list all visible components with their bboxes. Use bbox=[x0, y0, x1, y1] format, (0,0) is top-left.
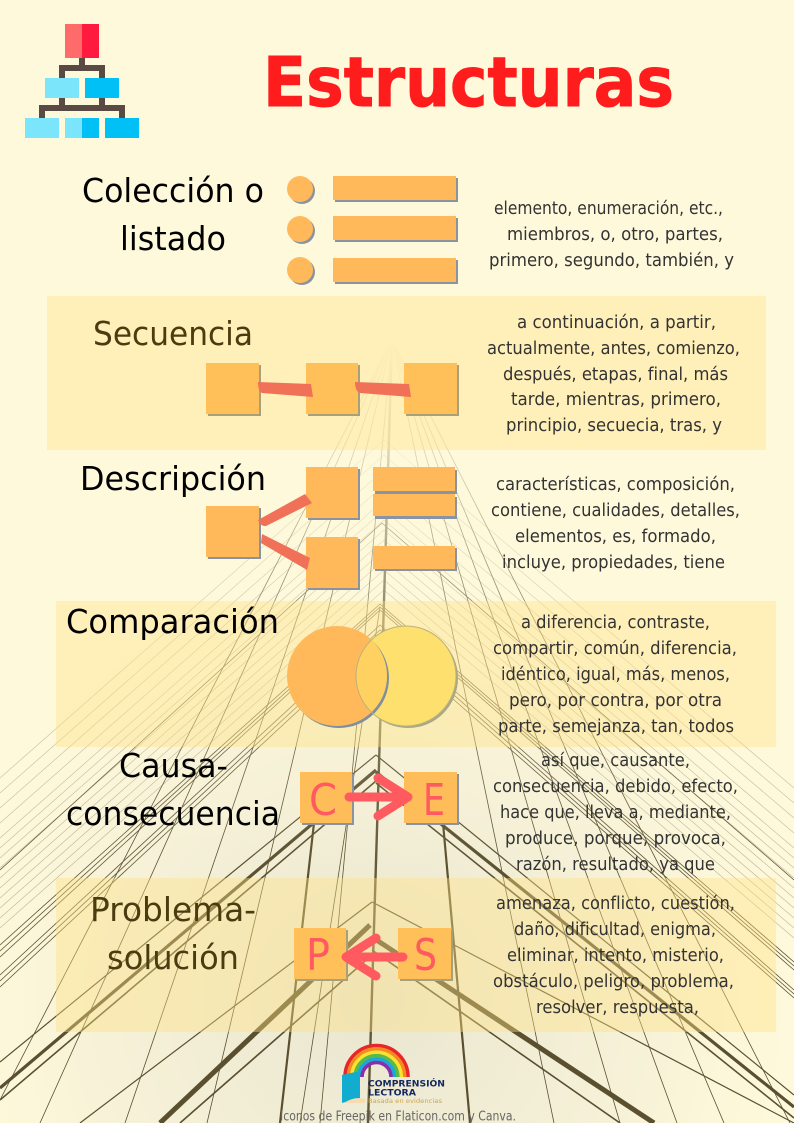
text: causa words: produce, porque, provoca, bbox=[505, 829, 726, 849]
icon: list bbox=[287, 176, 458, 285]
heading: colección: Colección o bbox=[82, 171, 264, 210]
text: secuencia words: tarde, mientras, primero, bbox=[511, 390, 721, 410]
text: secuencia words bbox=[487, 313, 740, 436]
heading: problema-solución: solución bbox=[107, 938, 239, 977]
icon: cause arrow effect bbox=[300, 772, 459, 826]
panel: causa-consecuencia bbox=[66, 746, 738, 875]
panel: colección bbox=[82, 171, 734, 285]
text: secuencia words: después, etapas, final, más bbox=[503, 365, 728, 385]
text: causa words bbox=[493, 751, 738, 875]
heading: problema-solución: Problema- bbox=[90, 890, 256, 929]
text: comparación words bbox=[493, 613, 737, 737]
text: problema words: resolver, respuesta, bbox=[536, 998, 699, 1018]
text: problema words: eliminar, intento, misterio, bbox=[507, 946, 724, 966]
text: comparación words: idéntico, igual, más, menos, bbox=[501, 665, 730, 685]
text: colección words: elemento, enumeración, etc., bbox=[494, 199, 723, 219]
icon: cause arrow effect: C bbox=[309, 775, 337, 826]
text: problema words: obstáculo, peligro, problema, bbox=[493, 972, 734, 992]
icon: venn bbox=[287, 626, 458, 728]
text: causa words: hace que, lleva a, mediante, bbox=[500, 803, 731, 823]
heading: causa-consecuencia: Causa- bbox=[119, 746, 228, 785]
text: comparación words: compartir, común, diferencia, bbox=[493, 639, 737, 659]
text: descripción words: incluye, propiedades, tiene bbox=[502, 553, 725, 573]
heading: descripción: Descripción bbox=[80, 459, 266, 498]
text: comparación words: parte, semejanza, tan, todos bbox=[498, 717, 734, 737]
text: problema words bbox=[493, 894, 735, 1018]
text: colección words bbox=[489, 199, 734, 271]
text: problema words: amenaza, conflicto, cuestión, bbox=[496, 894, 735, 914]
text: secuencia words: a continuación, a partir, bbox=[517, 313, 716, 333]
text: secuencia words: actualmente, antes, comienzo, bbox=[487, 339, 740, 359]
text: causa words: razón, resultado, ya que bbox=[516, 855, 715, 875]
heading: causa-consecuencia: consecuencia bbox=[66, 794, 280, 833]
icon: cause arrow effect: E bbox=[423, 775, 445, 826]
title: Estructuras bbox=[263, 43, 674, 123]
icon: solution arrow problem bbox=[294, 928, 453, 981]
text: problema words: daño, dificultad, enigma, bbox=[514, 920, 716, 940]
text: causa words: así que, causante, bbox=[541, 751, 690, 771]
text: secuencia words: principio, secuecia, tras, y bbox=[506, 416, 722, 436]
logo: LECTORA bbox=[368, 1088, 416, 1098]
heading: colección bbox=[82, 171, 264, 258]
text: comparación words: a diferencia, contraste, bbox=[521, 613, 710, 633]
heading: causa-consecuencia bbox=[66, 746, 280, 833]
logo: Basada en evidencias bbox=[368, 1097, 443, 1105]
heading: problema-solución bbox=[90, 890, 256, 977]
icon: solution arrow problem: S bbox=[414, 930, 437, 981]
icon: sequence bbox=[206, 363, 459, 416]
heading: comparación: Comparación bbox=[66, 602, 279, 641]
logo bbox=[342, 1046, 445, 1105]
panel: descripción bbox=[80, 459, 740, 590]
text: colección words: miembros, o, otro, partes, bbox=[507, 225, 723, 245]
icon: description bbox=[206, 467, 457, 590]
text: descripción words: contiene, cualidades, detalles, bbox=[491, 501, 740, 521]
logo: COMPRENSIÓN bbox=[368, 1078, 445, 1090]
panel: secuencia bbox=[47, 296, 766, 450]
heading: secuencia: Secuencia bbox=[93, 314, 253, 353]
panel: comparación bbox=[56, 601, 776, 747]
text: descripción words: elementos, es, formado, bbox=[515, 527, 716, 547]
panel: problema-solución bbox=[56, 878, 776, 1032]
text: descripción words: características, composición, bbox=[496, 475, 735, 495]
heading: colección: listado bbox=[120, 219, 226, 258]
text: causa words: consecuencia, debido, efecto, bbox=[493, 777, 738, 797]
text: comparación words: pero, por contra, por otra bbox=[509, 691, 722, 711]
icon: solution arrow problem: P bbox=[306, 930, 330, 981]
text: descripción words bbox=[491, 475, 740, 573]
text: colección words: primero, segundo, también, y bbox=[489, 251, 734, 271]
icon: hierarchy bbox=[25, 24, 139, 138]
